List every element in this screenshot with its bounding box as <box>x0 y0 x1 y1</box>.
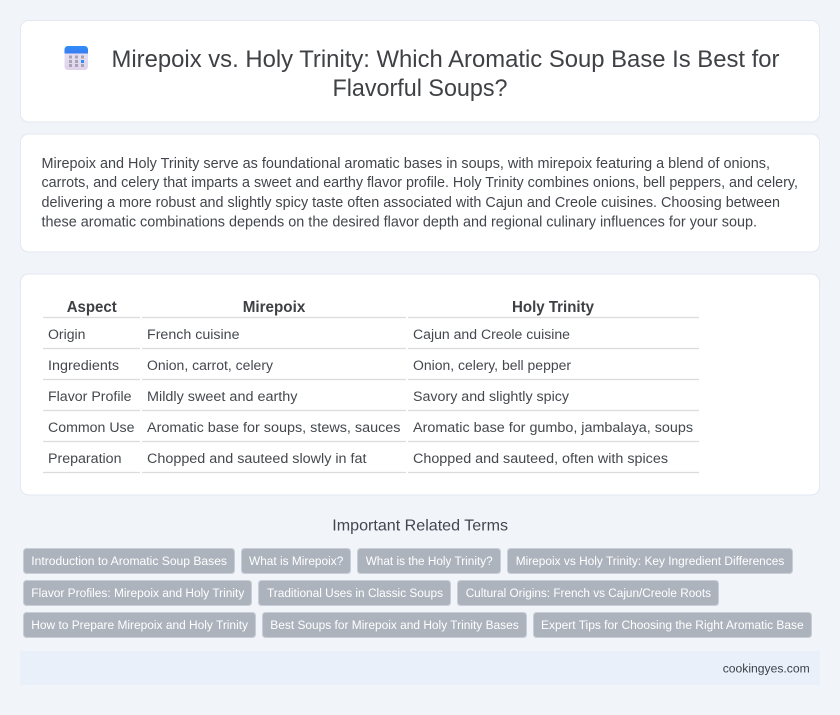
panel: title header <box>20 20 820 122</box>
row: preparation: Preparation <box>48 451 122 467</box>
row: ingredients <box>43 358 699 380</box>
panel: introduction <box>20 134 820 252</box>
row: origin: Cajun and Creole cuisine <box>413 327 570 343</box>
row: ingredients: Ingredients <box>48 358 119 374</box>
heading: important related terms: Important Related Terms <box>332 518 508 535</box>
chip <box>24 548 234 574</box>
row: flavor profile: Savory and slightly spicy <box>413 389 570 405</box>
chip <box>458 580 718 606</box>
row: ingredients: Onion, carrot, celery <box>147 358 274 374</box>
chip <box>508 548 792 574</box>
intro paragraph: these aromatic combinations depends on the desired flavor depth and regional culinary influences for your soup. <box>42 214 757 230</box>
intro paragraph <box>42 156 798 230</box>
row: common use: Aromatic base for soups, stews, sauces <box>147 420 400 436</box>
chip <box>262 612 526 638</box>
chip <box>24 612 256 638</box>
row: origin: French cuisine <box>147 327 240 343</box>
row: common use: Aromatic base for gumbo, jambalaya, soups <box>413 420 693 436</box>
row: common use: Common Use <box>48 420 135 436</box>
icon: calendar <box>64 46 88 70</box>
row: flavor profile: Flavor Profile <box>48 389 132 405</box>
footer <box>20 651 820 685</box>
table header row: Aspect <box>67 299 117 316</box>
chip: Flavor Profiles: Mirepoix and Holy Trinity <box>31 586 245 600</box>
chip: Introduction to Aromatic Soup Bases <box>31 554 227 568</box>
chip: What is Mirepoix? <box>249 554 344 568</box>
chip: Traditional Uses in Classic Soups <box>267 586 443 600</box>
row: origin: Origin <box>48 327 86 343</box>
row: preparation <box>43 451 699 472</box>
chip: Best Soups for Mirepoix and Holy Trinity Bases <box>270 618 519 632</box>
title text: Flavorful Soups? <box>332 75 508 102</box>
footer: cookingyes.com <box>723 661 810 675</box>
row: preparation: Chopped and sauteed slowly in fat <box>147 451 367 467</box>
row: flavor profile <box>43 389 699 410</box>
chip: Cultural Origins: French vs Cajun/Creole Roots <box>466 586 711 600</box>
row: ingredients: Onion, celery, bell pepper <box>413 358 571 374</box>
chip: Mirepoix vs Holy Trinity: Key Ingredient Differences <box>516 554 784 568</box>
chip <box>534 612 812 638</box>
chip: How to Prepare Mirepoix and Holy Trinity <box>31 618 249 632</box>
row: preparation: Chopped and sauteed, often with spices <box>413 451 668 467</box>
chip <box>242 548 350 574</box>
title text: Mirepoix vs. Holy Trinity: Which Aromatic Soup Base Is Best for <box>112 46 780 73</box>
intro paragraph: carrots, and celery that imparts a sweet and earthy flavor profile. Holy Trinity combines onions, bell peppers, and celery, <box>42 175 798 191</box>
chip <box>258 580 450 606</box>
row: common use <box>43 420 699 442</box>
table header row: Holy Trinity <box>512 299 594 316</box>
related term chips <box>24 548 812 638</box>
intro paragraph: delivering a more robust and slightly spicy taste often associated with Cajun and Creole cuisines. Choosing between <box>42 195 780 211</box>
intro paragraph: Mirepoix and Holy Trinity serve as foundational aromatic bases in soups, with mirepoix featuring a blend of onions, <box>42 156 770 172</box>
table header row <box>43 299 699 318</box>
row: origin <box>43 327 699 348</box>
panel: comparison table <box>20 274 820 495</box>
chip: Expert Tips for Choosing the Right Aromatic Base <box>541 618 804 632</box>
chip: What is the Holy Trinity? <box>366 554 493 568</box>
chip <box>24 580 252 606</box>
chip <box>358 548 500 574</box>
title text <box>112 46 780 102</box>
table header row: Mirepoix <box>243 299 305 316</box>
row: flavor profile: Mildly sweet and earthy <box>147 389 298 405</box>
